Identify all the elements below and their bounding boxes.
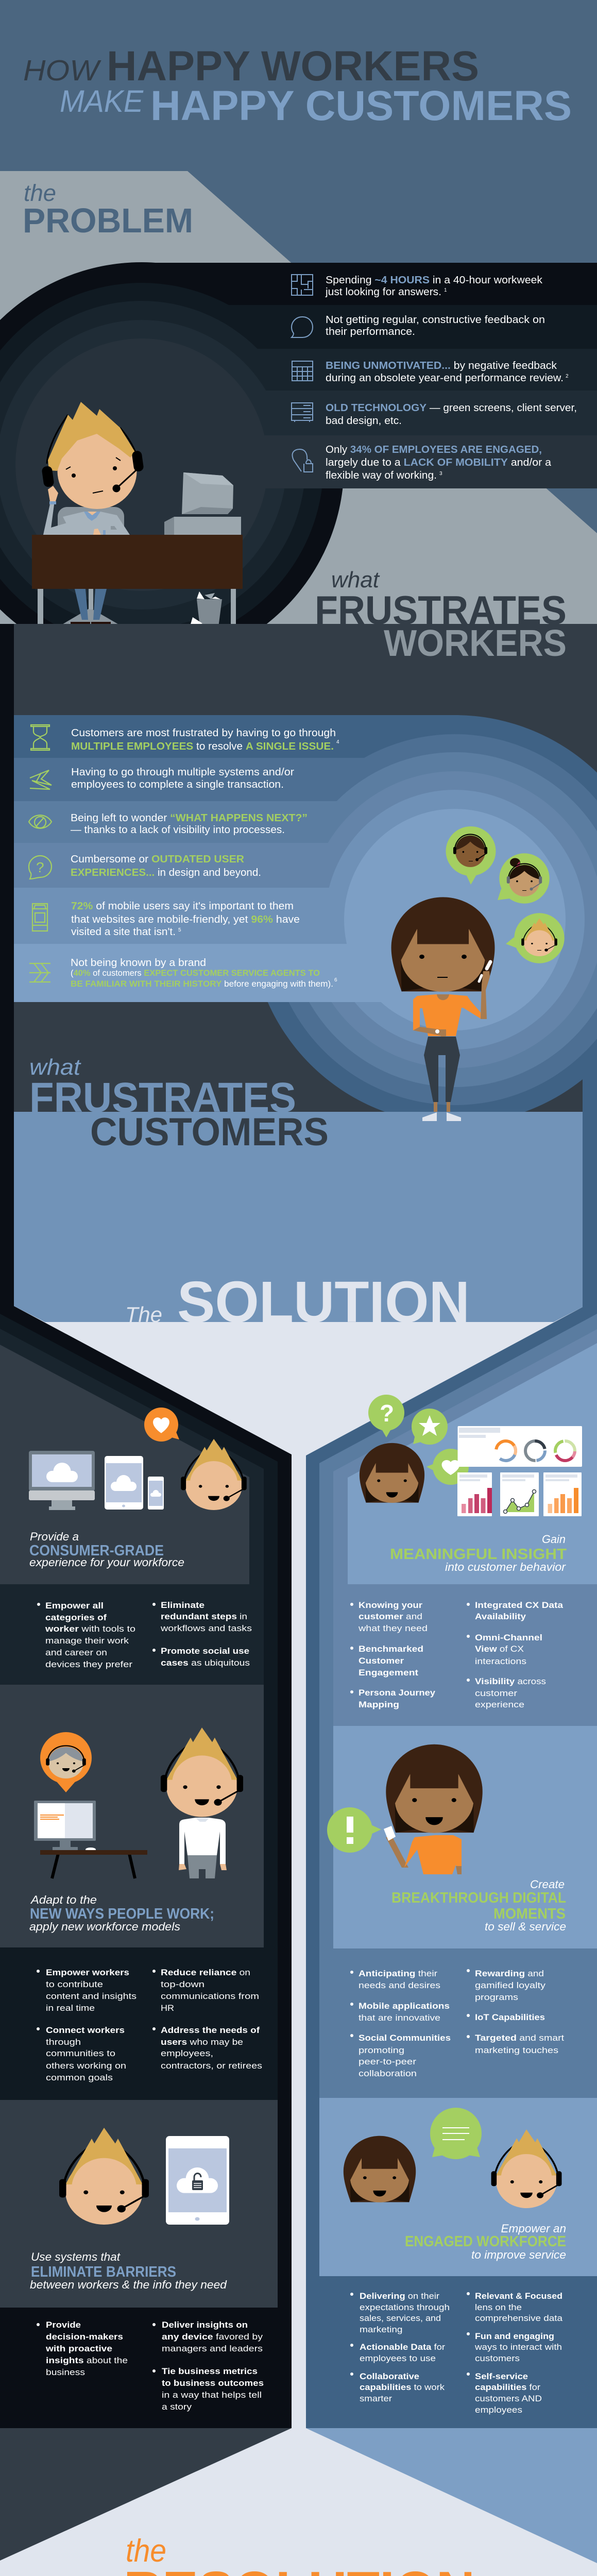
heading: digital moments: MOMENTS [493,1906,566,1922]
bullets: new ways: Empower workers [46,1968,129,1977]
bullets: eliminate barriers: any device favored by [162,2332,263,2342]
heading: engaged workforce: ENGAGED WORKFORCE [405,2233,566,2250]
bullets: consumer-grade: Eliminate [161,1600,204,1610]
heading: customers: CUSTOMERS [90,1110,329,1154]
frustration row 2 [30,767,294,790]
bullets: engaged workforce: Delivering on their [360,2291,439,2301]
problem row 2: their performance. [326,326,415,337]
bullets: digital moments: Rewarding and [475,1969,544,1978]
bullets: engaged workforce: customers [475,2353,520,2363]
bullets: digital moments: Mobile applications [359,2001,450,2011]
icon: happy worker [59,2128,149,2225]
heading: engaged workforce: Empower an [501,2222,566,2235]
chart: green line [500,1472,539,1516]
panel: consumer-grade illustration [29,1408,247,1510]
bullets: new ways: Connect workers [46,2025,125,2035]
bullets: digital moments: gamified loyalty [475,1980,546,1990]
icon: star bubble [412,1409,448,1445]
chart: donut dashboard [457,1426,582,1467]
bullets: meaningful insight: customer and [359,1612,422,1621]
frustration row 6: (40% of customers EXPECT CUSTOMER SERVICE AGENTS TO [71,968,320,978]
bullets: digital moments: marketing touches [475,2045,558,2055]
frustration row 5: 5 [178,927,181,933]
icon: phone [148,1477,164,1510]
frustration row 3: — thanks to a lack of visibility into processes. [71,824,285,836]
heading: meaningful insight: into customer behavior [445,1561,567,1573]
frustration row 4: EXPERIENCES... in design and beyond. [71,867,261,878]
problem row 4 [292,402,577,427]
bullets: digital moments: Anticipating their [359,1969,437,1978]
frustration row 1: 4 [336,739,339,745]
bullets: engaged workforce: lens on the [475,2302,522,2312]
heading: meaningful insight: Gain [542,1533,566,1546]
frustration row 1: Customers are most frustrated by having to go through [71,727,336,739]
heading: what frustrates workers (top): FRUSTRATES [315,587,567,633]
dark customers panel [14,624,597,1113]
bullets: consumer-grade: redundant steps in [161,1612,247,1621]
bullets: new ways: contractors, or retirees [161,2061,262,2071]
bullets: engaged workforce: Self-service [475,2371,528,2381]
heading: what frustrates customers (top): FRUSTRATES [29,1074,296,1121]
chart: orange bars [543,1472,582,1516]
bullets: eliminate barriers: insights about the [46,2355,128,2365]
bullets: engaged workforce: employees to use [360,2353,436,2363]
icon: crossed eye [29,815,52,828]
heading: consumer-grade: CONSUMER-GRADE [29,1543,164,1559]
panel: new ways illustration [34,1727,243,1878]
bullets: new ways: Address the needs of [161,2025,260,2035]
speech bubble agent 2 [498,853,550,904]
bullets: meaningful insight: Integrated CX Data [475,1600,564,1610]
heading: engaged workforce [405,2222,566,2261]
chart: pink bars [457,1472,492,1516]
heading: the resolution [124,2533,475,2576]
right blue strip [306,1066,597,2428]
heading: eliminate barriers: between workers & the info they need [30,2278,227,2291]
bullets: engaged workforce: customers AND [475,2394,542,2403]
grey problem background [0,171,597,626]
bullets: consumer-grade: worker with tools to [45,1624,135,1634]
bullets: new ways: communities to [46,2048,115,2058]
panel: eliminate barriers illustration [59,2128,229,2225]
heading: new ways: apply new workforce models [29,1920,180,1933]
icon: server [292,403,313,422]
bullets: digital moments: promoting [359,2045,404,2055]
bullets: eliminate barriers: decision-makers [46,2332,123,2342]
bullets: new ways: HR [161,2003,174,2013]
worker at desk illustration [32,402,243,629]
panel: digital moments illustration [327,1744,483,1874]
bullets: digital moments: collaboration [359,2069,417,2078]
bullets: engaged workforce: sales, services, and [360,2313,441,2323]
frustration row 5: visited a site that isn't. [71,926,176,938]
heading: digital moments: BREAKTHROUGH DIGITAL [391,1890,566,1906]
bullets: engaged workforce: capabilities to work [360,2382,445,2392]
bullets: engaged workforce: Collaborative [360,2371,419,2381]
bullets: eliminate barriers: to business outcomes [162,2378,264,2388]
icon: tablet with unlocked cloud [166,2136,229,2225]
heading: what frustrates customers (top): what [29,1055,81,1080]
frustration row 6: Not being known by a brand [71,957,206,969]
icon: connected nodes [29,963,50,982]
bullets: digital moments: that are innovative [359,2013,440,2023]
heading: workers: WORKERS [384,623,567,664]
bullets: meaningful insight: Engagement [359,1668,418,1677]
frustration row 1: MULTIPLE EMPLOYEES to resolve A SINGLE ISSUE. [71,741,334,752]
bullets: new ways: common goals [46,2073,113,2082]
dark corner [0,2428,292,2561]
heading: the solution: SOLUTION [177,1269,470,1334]
problem row 1: just looking for answers. [325,286,441,298]
bullets: meaningful insight: Availability [475,1612,526,1621]
bullets: meaningful insight: Benchmarked [359,1644,423,1654]
resolution background [0,2428,597,2576]
bullets: meaningful insight: Omni-Channel [475,1633,542,1642]
problem row 5: Only 34% OF EMPLOYEES ARE ENGAGED, [326,444,542,455]
bullets: engaged workforce: Actionable Data for [360,2342,445,2352]
icon: customer face [344,2136,416,2202]
icon: hourglass [31,725,49,750]
heading: the problem: the [24,180,56,206]
light V background [45,1322,554,2428]
bullets: eliminate barriers: a story [162,2402,192,2412]
problem row 5: 3 [439,471,442,477]
heading: meaningful insight [390,1533,567,1573]
icon: calendar [292,361,313,381]
icon: happy worker [181,1439,247,1510]
frustration row 3 [29,812,308,836]
icon: customer with phone [384,1744,483,1874]
bullets: consumer-grade: Promote social use [161,1646,249,1656]
bullets: engaged workforce: Relevant & Focused [475,2291,562,2301]
icon: question bubble [368,1395,404,1437]
problem row 3 [292,360,569,384]
frustration row 2: Having to go through multiple systems and/or [71,767,294,778]
title [23,43,572,129]
heading: new ways: NEW WAYS PEOPLE WORK; [30,1906,214,1922]
bullets: engaged workforce: ways to interact with [474,2342,562,2352]
problem row 4: OLD TECHNOLOGY — green screens, client server, [326,402,577,414]
frustration row 2: employees to complete a single transaction. [71,779,284,790]
bullets: new ways: others working on [46,2061,126,2071]
title: MAKE [60,84,144,118]
bullets: eliminate barriers: Tie business metrics [162,2366,258,2376]
problem row 5: largely due to a LACK OF MOBILITY and/or a [326,457,552,468]
frustration row 5: that websites are mobile-friendly, yet 96% have [71,914,300,925]
bullets: new ways [37,1968,262,2082]
icon: customer face [360,1443,424,1503]
bullets: digital moments: programs [475,1992,518,2002]
problem row 5 [293,444,552,481]
bullets: engaged workforce: marketing [360,2325,403,2334]
concentric blue circle with stepped rows [14,715,597,1124]
bullets: new ways: in real time [46,2003,95,2013]
heading: consumer-grade: experience for your workforce [29,1556,184,1569]
frustration row 4: ? [36,859,44,875]
heading: meaningful insight: MEANINGFUL INSIGHT [390,1546,567,1563]
heading: eliminate barriers: ELIMINATE BARRIERS [31,2264,176,2280]
left black strip [0,624,292,2428]
right column layered bands [319,1314,597,2276]
bullets: engaged workforce: capabilities for [475,2382,540,2392]
heading: the resolution: the [126,2533,166,2569]
problem row 1 [292,275,543,298]
bullets: meaningful insight: experience [475,1700,524,1709]
bullets: engaged workforce: expectations through [360,2302,450,2312]
bullets: new ways: top-down [161,1979,204,1989]
bullets: digital moments: peer-to-peer [359,2057,416,2066]
icon: question bubble [29,856,52,879]
bullets: meaningful insight: Knowing your [359,1600,422,1610]
bullets: engaged workforce: Fun and engaging [475,2331,554,2341]
problem row 3: during an obsolete year-end performance review. [326,372,564,384]
bullets: digital moments: Targeted and smart [475,2033,564,2043]
bullets: meaningful insight: what they need [358,1623,428,1633]
bullets: consumer-grade: Empower all [45,1601,104,1611]
bullets: eliminate barriers: Provide [46,2320,81,2330]
icon: desktop monitor [29,1451,95,1510]
heading: what frustrates customers (top) [29,1055,296,1121]
bullets: eliminate barriers: with proactive [45,2344,112,2353]
frustration row 4: Cumbersome or OUTDATED USER [71,854,245,865]
icon: location pin with lock [293,449,313,472]
blue corner [306,2428,597,2563]
frustration row 3: Being left to wonder “WHAT HAPPENS NEXT?” [71,812,308,824]
heading: new ways [29,1893,214,1933]
bullets: digital moments: Social Communities [359,2033,451,2043]
icon: chat bubble [430,2108,482,2159]
bullets: consumer-grade: devices they prefer [45,1659,132,1669]
panel: meaningful insight illustration [360,1395,582,1516]
icon: mobile store [32,904,47,931]
bullets: eliminate barriers: business [46,2367,85,2377]
problem row 4: bad design, etc. [326,415,402,427]
problem row 2 [292,314,545,337]
heading: what frustrates workers (top) [315,567,567,633]
problem row 5: flexible way of working. [326,470,437,481]
bullets: consumer-grade: categories of [45,1613,107,1622]
bullets: eliminate barriers: Deliver insights on [162,2320,248,2330]
concentric dark circle with stepped rows [0,262,597,624]
title: HOW [23,54,101,87]
icon: heart bubble [144,1408,179,1442]
heading: new ways: Adapt to the [30,1893,97,1906]
bullets: new ways: communications from [161,1991,259,2001]
heading: eliminate barriers [30,2250,227,2291]
bullets: new ways: employees, [161,2048,213,2058]
bullets: engaged workforce [350,2291,563,2415]
bullets: engaged workforce: comprehensive data [475,2313,563,2323]
heading: the problem [23,180,193,240]
bullets: consumer-grade [37,1600,252,1669]
bullets: engaged workforce: employees [475,2405,522,2415]
icon: tangled network [30,770,52,789]
bullets: eliminate barriers [37,2320,264,2412]
bullets: meaningful insight: Persona Journey [359,1688,436,1698]
bullets: meaningful insight: Visibility across [475,1676,546,1686]
icon: agent bubble [40,1732,92,1792]
customer with phone illustration [391,826,565,1112]
heading: digital moments: to sell & service [485,1920,566,1933]
frustration row 5 [32,901,300,938]
speech bubble agent 1 [446,826,496,885]
blue panel [14,1112,583,1322]
bullets: engaged workforce: smarter [360,2394,392,2403]
heading: engaged workforce: to improve service [471,2248,566,2261]
icon: standing worker [161,1727,243,1878]
heading: the problem: PROBLEM [23,201,193,240]
bullets: meaningful insight: Customer [359,1656,404,1666]
heading: consumer-grade [29,1530,184,1569]
title: HAPPY WORKERS [107,43,479,90]
bullets: eliminate barriers: managers and leaders [162,2344,263,2353]
bullets: digital moments: IoT Capabilities [475,2012,545,2022]
bullets: consumer-grade: workflows and tasks [160,1623,252,1633]
icon: speech bubble [292,317,313,337]
bullets: new ways: Reduce reliance on [161,1968,250,1977]
icon: question bubble: ? [380,1400,394,1427]
frustration row 1 [31,725,339,752]
bullets: digital moments: needs and desires [359,1980,440,1990]
heading: consumer-grade: Provide a [30,1530,79,1543]
heading: digital moments [391,1878,566,1933]
left column layered bands [0,1314,278,2308]
bullets: consumer-grade: manage their work [45,1636,129,1646]
speech bubble agent 3 [506,913,565,963]
icon: desktop with table [34,1801,147,1878]
bullets: new ways: to contribute [46,1979,103,1989]
bullets: consumer-grade: and career on [45,1648,107,1657]
bullets: meaningful insight [350,1600,564,1709]
problem row 1: Spending ~4 HOURS in a 40-hour workweek [326,275,543,286]
bullets: digital moments [350,1969,564,2078]
frustration row 6: BE FAMILIAR WITH THEIR HISTORY before engaging with them). [71,979,333,989]
frustration row 6 [29,957,337,989]
frustration row 6: 6 [334,977,337,983]
heading: digital moments: Create [530,1878,565,1891]
bullets: meaningful insight: customer [475,1688,517,1698]
problem row 2: Not getting regular, constructive feedback on [326,314,545,326]
bullets: meaningful insight: interactions [475,1656,526,1666]
bullets: meaningful insight: View of CX [475,1644,524,1654]
bullets: meaningful insight: Mapping [359,1700,399,1709]
icon: heart bubble [427,1449,469,1485]
bullets: consumer-grade: cases as ubiquitous [161,1658,250,1668]
bullets: eliminate barriers: in a way that helps tell [162,2390,262,2400]
heading: the solution: The [125,1302,162,1327]
heading: what frustrates workers (top): what [331,567,380,592]
icon: maze [292,275,313,295]
icon: worker face [491,2129,561,2208]
problem row 1: 1 [444,287,447,293]
problem row 3: BEING UNMOTIVATED... by negative feedback [326,360,557,371]
problem row 3: 2 [566,374,569,379]
bullets: new ways: content and insights [46,1991,137,2001]
heading: eliminate barriers: Use systems that [31,2250,121,2263]
title: HAPPY CUSTOMERS [150,82,572,129]
bullets: new ways: users who may be [161,2037,243,2047]
header background [0,0,597,624]
icon: alert bubble [327,1807,381,1853]
panel: engaged workforce illustration [344,2108,561,2208]
shoes of customer [422,1112,461,1121]
frustration row 4 [29,854,261,879]
icon: tablet [105,1456,143,1510]
bullets: new ways: through [46,2037,81,2047]
frustration row 5: 72% of mobile users say it's important to them [71,901,294,912]
